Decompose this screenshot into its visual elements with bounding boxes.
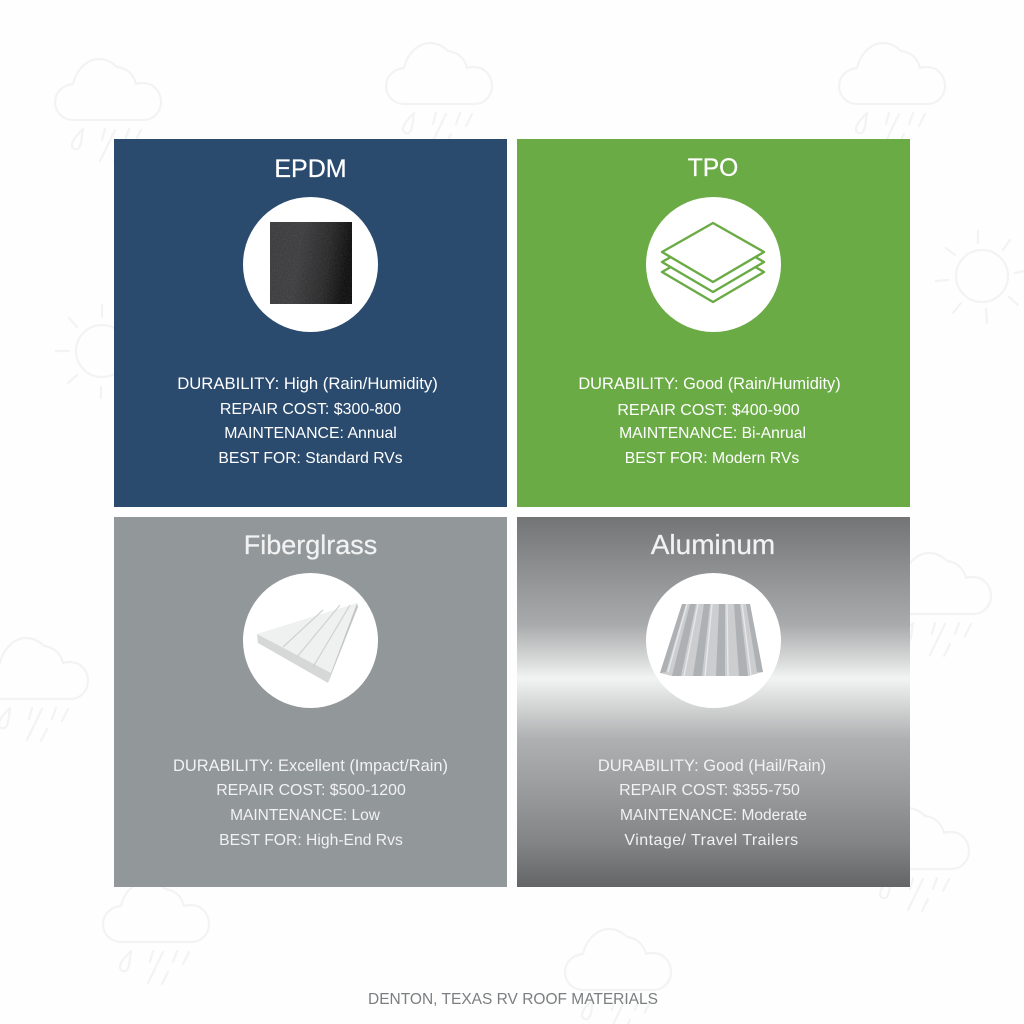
footer caption: DENTON, TEXAS RV ROOF MATERIALS [368, 991, 658, 1008]
Aluminum details: DURABILITY: Good (Hail/Rain) [598, 757, 826, 775]
TPO details: DURABILITY: Good (Rain/Humidity) [578, 375, 841, 393]
icon: corrugated metal sheet [646, 573, 781, 708]
Aluminum details [598, 757, 826, 849]
EPDM details [177, 374, 438, 467]
TPO details [578, 375, 841, 467]
Aluminum details: MAINTENANCE: Moderate [620, 807, 807, 824]
EPDM details: REPAIR COST: $300-800 [220, 401, 401, 418]
TPO details: MAINTENANCE: Bi-Anrual [619, 425, 806, 442]
Fiberglass details: BEST FOR: High-End Rvs [219, 832, 403, 849]
icon: layered sheets [646, 197, 781, 332]
panel: EPDM [114, 139, 507, 507]
Fiberglass details: MAINTENANCE: Low [230, 807, 380, 824]
heading: Fiberglass: Fiberglrass [244, 530, 377, 560]
EPDM details: BEST FOR: Standard RVs [218, 450, 403, 467]
heading: EPDM: EPDM [274, 155, 347, 183]
panel: TPO [517, 139, 910, 507]
Fiberglass details: REPAIR COST: $500-1200 [216, 782, 406, 799]
EPDM details: DURABILITY: High (Rain/Humidity) [177, 374, 438, 393]
TPO details: BEST FOR: Modern RVs [625, 450, 799, 467]
icon: fiberglass panel [243, 573, 378, 708]
heading: Aluminum: Aluminum [651, 529, 775, 560]
EPDM details: MAINTENANCE: Annual [224, 425, 397, 442]
Aluminum details: REPAIR COST: $355-750 [619, 782, 800, 799]
icon: black rubber sheet [243, 197, 378, 332]
heading: TPO: TPO [688, 155, 738, 182]
Aluminum details: Vintage/ Travel Trailers [624, 832, 799, 849]
panel: Fiberglass [114, 517, 507, 887]
panel: Aluminum [517, 517, 910, 887]
TPO details: REPAIR COST: $400-900 [617, 401, 800, 419]
Fiberglass details [173, 757, 448, 849]
Fiberglass details: DURABILITY: Excellent (Impact/Rain) [173, 757, 448, 775]
